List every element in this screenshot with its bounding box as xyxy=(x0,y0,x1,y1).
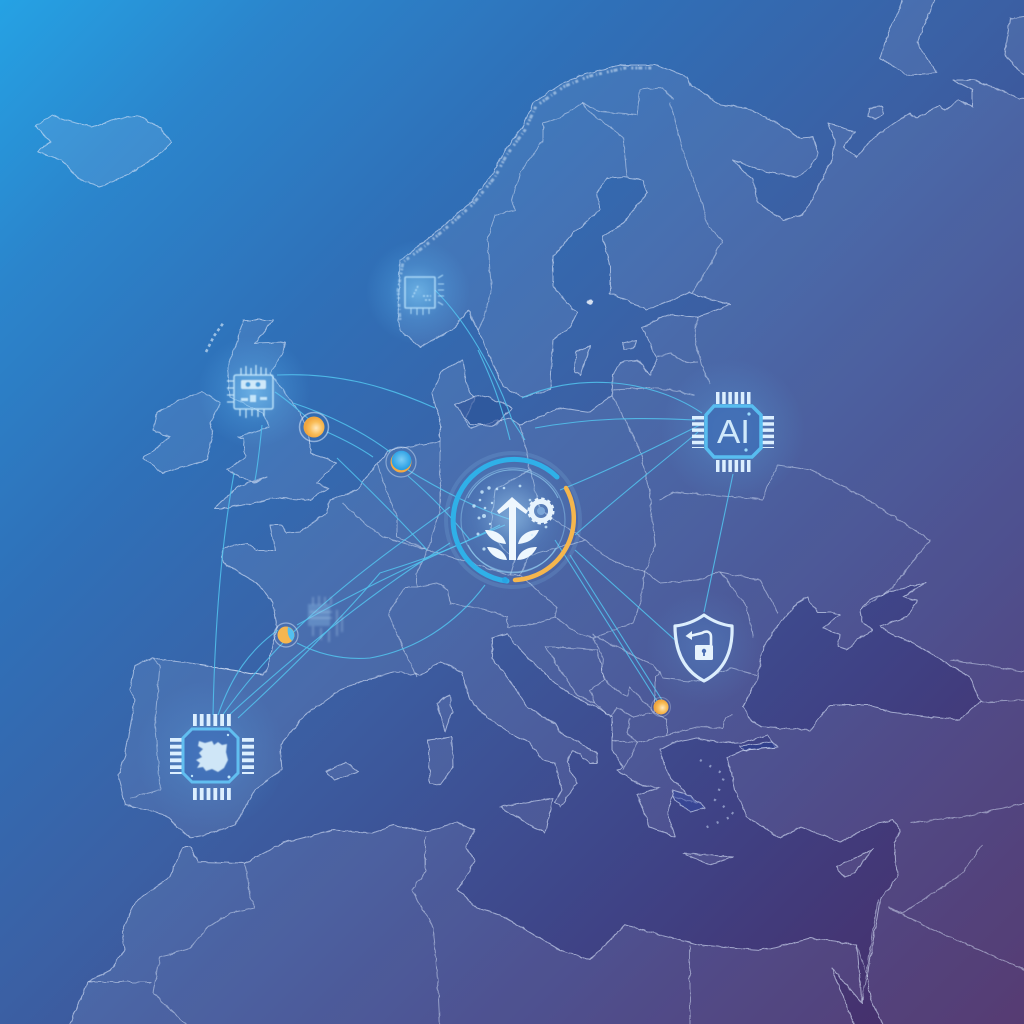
land: Aland speck xyxy=(588,300,592,304)
icon: Spain lion chip xyxy=(176,720,248,794)
icon: AI chip: AI xyxy=(717,413,750,450)
icon: Norway chip xyxy=(405,275,444,315)
icon: padlock shield xyxy=(675,615,732,681)
land: Kanin peninsula xyxy=(880,0,937,75)
hub centre glow xyxy=(489,488,537,536)
hub inner rings xyxy=(461,468,565,573)
icon: France faded chip xyxy=(308,596,342,642)
glow: Spain chip xyxy=(136,680,286,830)
land: Aegean shallows xyxy=(672,790,705,812)
icon: heraldic lion xyxy=(196,741,228,772)
land: Sardinia xyxy=(428,737,453,785)
node: Balkan orange orb xyxy=(652,698,670,716)
glow: AI chip xyxy=(661,359,805,503)
land: Gotland xyxy=(574,346,590,376)
land: Turkish strait xyxy=(740,742,778,750)
icon: gear xyxy=(530,500,552,522)
hub data dots xyxy=(472,485,547,551)
land: Crete xyxy=(683,853,733,865)
hub orange progress arc xyxy=(515,488,574,580)
coastal fringe: Aegean islands xyxy=(700,760,735,830)
hub blue progress arc xyxy=(453,459,557,581)
land: Corsica xyxy=(437,695,452,732)
land: Great Britain xyxy=(215,320,337,508)
connection lines xyxy=(213,290,733,718)
node: France half orb xyxy=(274,623,298,647)
land: North Africa xyxy=(63,822,862,1024)
coastal fringe: Norway fjords xyxy=(398,68,655,320)
icon: UK chip xyxy=(227,365,273,418)
central hub xyxy=(446,453,580,587)
node: UK orange orb xyxy=(300,412,328,442)
coastal fringe: Scottish isles xyxy=(206,322,224,352)
glow: central hub xyxy=(446,455,578,587)
land: Ireland xyxy=(143,392,220,473)
land: Cyprus xyxy=(836,849,873,877)
node: Netherlands blue orb xyxy=(386,447,416,477)
land: Balearic islands xyxy=(325,762,358,780)
glow: shield xyxy=(646,590,762,706)
land: Danish isles xyxy=(455,395,512,426)
land: Novaya Zemlya edge xyxy=(1005,15,1024,80)
glow: UK node xyxy=(198,336,310,448)
land: Sicily xyxy=(500,798,553,833)
glow: Norway node xyxy=(366,240,470,344)
land: Iceland xyxy=(36,115,172,187)
hub outer faint ring xyxy=(446,453,580,587)
land: Kolguev island xyxy=(868,106,884,119)
icon: up arrow and plant xyxy=(485,497,539,560)
land: Estonian islands xyxy=(622,340,636,349)
icon: AI chip xyxy=(698,398,768,466)
